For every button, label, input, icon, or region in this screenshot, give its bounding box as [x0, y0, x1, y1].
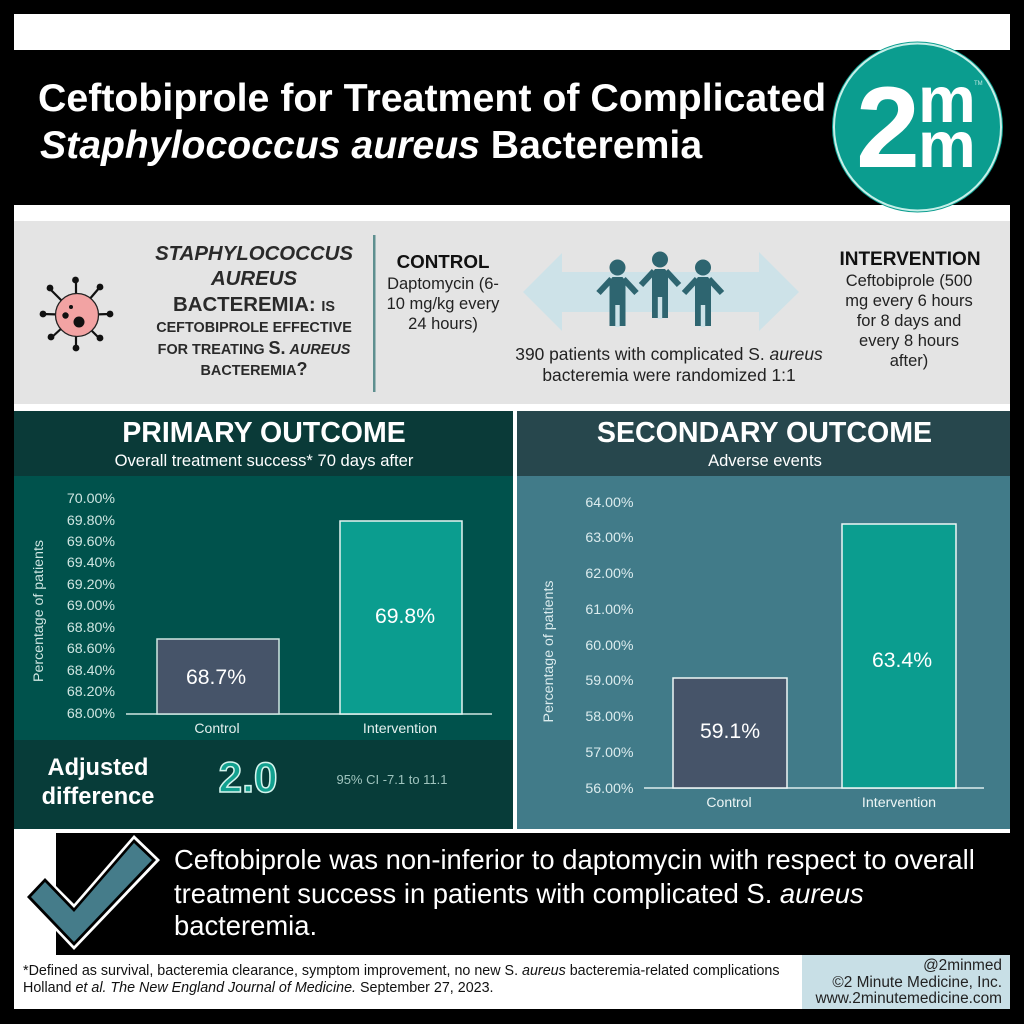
secondary heading — [517, 411, 1010, 476]
primary bar chart: 68.7% — [186, 666, 246, 689]
intervention arm: after) — [890, 352, 928, 370]
control arm: CONTROL — [397, 251, 489, 272]
primary bar chart: 69.80% — [67, 513, 115, 529]
study question text: STAPHYLOCOCCUS — [155, 243, 353, 265]
secondary bar chart: 61.00% — [585, 602, 634, 618]
title: Ceftobiprole for Treatment of Complicated — [38, 76, 826, 120]
secondary bar chart: 63.4% — [872, 649, 932, 672]
primary bar chart: 69.60% — [67, 534, 115, 550]
primary bar chart: Percentage of patients — [31, 540, 47, 682]
header band — [14, 50, 1010, 205]
primary bar chart: 68.20% — [67, 684, 115, 700]
study question text: AUREUS — [210, 268, 297, 290]
logo: 2 Minute Medicine: 2 — [856, 64, 920, 192]
secondary bar chart: 57.00% — [585, 745, 634, 761]
study question text — [155, 243, 353, 379]
study question text: BACTEREMIA? — [201, 359, 307, 379]
primary heading: PRIMARY OUTCOME — [122, 417, 406, 449]
icon: three patients — [598, 252, 722, 327]
intervention arm: mg every 6 hours — [845, 292, 973, 310]
study question text: BACTEREMIA: IS — [173, 294, 335, 316]
logo: 2 Minute Medicine: m — [918, 108, 976, 181]
secondary heading: SECONDARY OUTCOME — [597, 417, 932, 449]
secondary bar chart: 58.00% — [585, 709, 634, 725]
footnote and citation: *Defined as survival, bacteremia clearance, symptom improvement, no new S. aureus bacteremia-related complications — [23, 963, 780, 979]
adjusted difference — [14, 740, 513, 829]
primary bar chart: 68.80% — [67, 620, 115, 636]
adjusted difference: 95% CI -7.1 to 11.1 — [336, 772, 448, 787]
primary bar chart: Control — [194, 720, 240, 736]
control arm: 24 hours) — [408, 315, 478, 333]
primary bar chart — [31, 491, 492, 737]
primary heading: Overall treatment success* 70 days after — [115, 451, 414, 470]
logo: 2 Minute Medicine: TM — [974, 81, 983, 87]
icon: bacterium — [40, 277, 113, 351]
adjusted difference: 2.0 — [218, 755, 278, 802]
control arm — [387, 251, 500, 333]
logo: 2 Minute Medicine — [832, 42, 1003, 212]
conclusion text: bacteremia. — [174, 910, 317, 941]
intervention arm: INTERVENTION — [839, 249, 981, 270]
secondary bar chart: 64.00% — [585, 495, 634, 511]
intervention arm: every 8 hours — [859, 332, 959, 350]
secondary bar chart: 60.00% — [585, 638, 634, 654]
primary bar chart: 70.00% — [67, 491, 115, 507]
icon: check mark — [24, 835, 160, 950]
secondary heading: Adverse events — [708, 452, 822, 470]
secondary bar chart: 59.00% — [585, 673, 634, 689]
control arm: 10 mg/kg every — [387, 295, 500, 313]
panel: study overview — [14, 221, 1010, 404]
footnote and citation — [23, 963, 780, 996]
secondary bar chart — [541, 495, 984, 811]
intervention arm — [839, 249, 981, 370]
secondary bar chart: 62.00% — [585, 566, 634, 582]
double arrow — [523, 252, 799, 331]
primary bar chart: 68.60% — [67, 641, 115, 657]
intervention arm: for 8 days and — [857, 312, 961, 330]
credits box: ©2 Minute Medicine, Inc. — [832, 974, 1002, 991]
primary bar chart: 69.00% — [67, 598, 115, 614]
title line 2: Staphylococcus aureus Bacteremia — [40, 124, 703, 167]
primary bar chart: Intervention — [363, 721, 437, 737]
credits box: www.2minutemedicine.com — [815, 990, 1002, 1007]
panel: secondary outcome — [517, 411, 1010, 829]
secondary bar chart: 56.00% — [585, 781, 634, 797]
study question text: FOR TREATING S. AUREUS — [158, 338, 351, 358]
secondary bar chart: Intervention — [862, 795, 936, 811]
primary heading — [14, 411, 513, 476]
conclusion text: Ceftobiprole was non-inferior to daptomycin with respect to overall — [174, 844, 975, 875]
credits box — [802, 955, 1010, 1009]
adjusted difference: difference — [42, 784, 154, 810]
primary bar chart: 68.40% — [67, 663, 115, 679]
logo: 2 Minute Medicine: m — [918, 63, 976, 136]
secondary bar chart: Control — [706, 794, 752, 810]
control arm: Daptomycin (6- — [387, 275, 499, 293]
population text — [515, 344, 823, 385]
primary bar chart: 69.8% — [375, 605, 435, 628]
secondary bar chart: 59.1% — [700, 720, 760, 743]
footnote and citation: Holland et al. The New England Journal of Medicine. September 27, 2023. — [23, 980, 494, 996]
population text: 390 patients with complicated S. aureus — [515, 344, 823, 364]
secondary bar chart: 63.00% — [585, 530, 634, 546]
study question text: CEFTOBIPROLE EFFECTIVE — [156, 320, 352, 336]
primary bar chart: 68.00% — [67, 706, 115, 722]
conclusion text: treatment success in patients with complicated S. aureus — [174, 878, 864, 909]
conclusion banner — [56, 833, 1010, 955]
primary bar chart: 69.20% — [67, 577, 115, 593]
primary bar chart: 69.40% — [67, 555, 115, 571]
population text: bacteremia were randomized 1:1 — [542, 365, 796, 385]
secondary bar chart: Percentage of patients — [541, 581, 557, 722]
panel: primary outcome — [14, 411, 513, 829]
adjusted difference: Adjusted — [48, 755, 148, 781]
intervention arm: Ceftobiprole (500 — [846, 272, 972, 290]
credits box: @2minmed — [923, 957, 1002, 974]
conclusion text — [174, 844, 975, 941]
